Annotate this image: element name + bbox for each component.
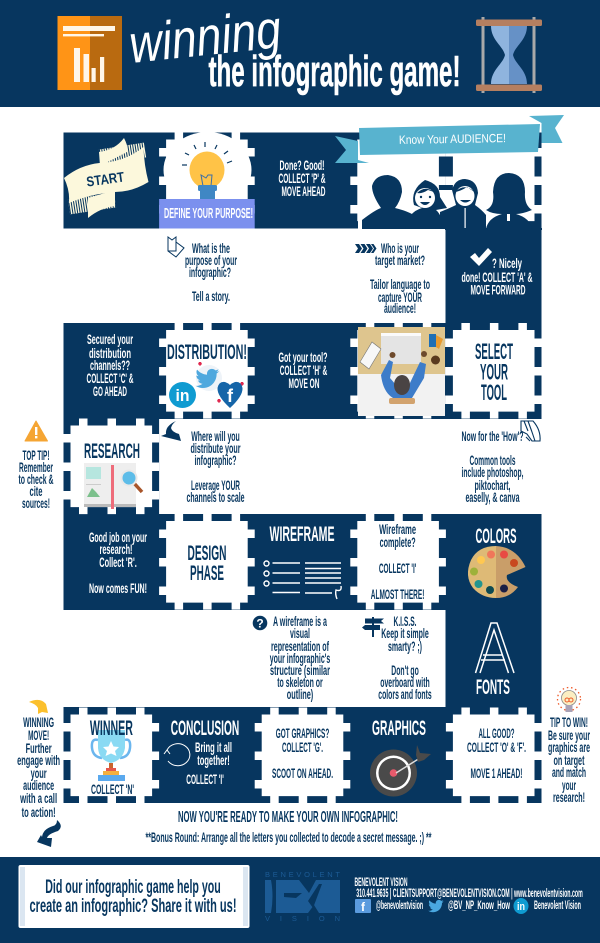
- icon: facebook: [355, 899, 371, 914]
- panel: wireframe complete: ALMOST THERE!: [371, 586, 424, 602]
- text: where will you distribute: distribute your: [190, 440, 241, 456]
- panel: wireframe complete: [350, 514, 446, 610]
- icon: linkedin: in: [176, 386, 190, 405]
- text: where will you distribute: Where will you: [191, 428, 240, 444]
- text: winning move: [17, 714, 60, 820]
- icon: trophy: [92, 730, 130, 781]
- text: channels to scale: [186, 489, 245, 505]
- panel: colors: COLORS: [476, 525, 516, 548]
- text: nicely done: done! COLLECT 'A' &: [462, 269, 532, 285]
- text: winning move: MOVE!: [28, 727, 49, 743]
- panel: desk illustration: [350, 323, 446, 419]
- text: who is your target market: Tailor language to: [370, 276, 430, 292]
- text: top tip: TOP TIP!: [22, 447, 50, 463]
- text: what is the purpose: Tell a story.: [192, 288, 230, 304]
- start label: START: [85, 168, 126, 190]
- panel: fonts: FONTS: [476, 676, 510, 699]
- icon: chevrons: [355, 244, 376, 253]
- text: a wireframe is: outline): [287, 686, 313, 702]
- panel: wireframe: [264, 523, 341, 599]
- icon: wireframe lines: [264, 561, 341, 599]
- icon: letter A outline: [476, 623, 514, 673]
- panel: design phase: PHASE: [190, 562, 224, 585]
- text: winning move: your: [31, 765, 47, 781]
- icon: target: [370, 745, 431, 796]
- panel: wireframe: WIREFRAME: [270, 523, 334, 546]
- header band: [0, 0, 600, 107]
- text: kiss: Don't go: [391, 662, 419, 678]
- text: COLLECT 'C' &: [86, 370, 134, 386]
- panel: got graphics: GOT GRAPHICS?: [276, 725, 329, 741]
- board: navy path: [64, 132, 542, 803]
- text: secured channels: distribution: [89, 345, 131, 361]
- text: secured channels: channels??: [90, 357, 130, 373]
- panel: start: [64, 138, 148, 218]
- icon: light bulb: [182, 142, 232, 202]
- icon: check mark: [470, 248, 492, 266]
- text: a wireframe is: [270, 613, 330, 702]
- text: kiss: overboard with: [380, 674, 430, 690]
- icon: facebook: f: [361, 900, 366, 914]
- icon: signpost: [362, 617, 384, 637]
- text: secured channels: Secured your: [87, 331, 133, 347]
- icon: orange report: [58, 16, 122, 90]
- text: good job on your research: Collect 'R'.: [99, 554, 137, 570]
- panel: all good: [446, 708, 542, 803]
- text: where will you distribute: [186, 428, 245, 505]
- footer band: [0, 857, 600, 943]
- text: a wireframe is: representation of: [271, 638, 329, 654]
- text: winning move: to action!: [22, 804, 56, 820]
- text: kiss: Keep it simple: [381, 625, 429, 641]
- text: a wireframe is: structure (similar: [270, 662, 330, 678]
- panel: define your purpose: [159, 132, 255, 228]
- text: who is your target market: [370, 240, 430, 316]
- panel: conclusion: [164, 717, 239, 787]
- icon: curvy arrow: [37, 820, 61, 847]
- text: Good job on your: [89, 529, 147, 545]
- text: a wireframe is: to skeleton or: [277, 674, 323, 690]
- text: done good: Done? Good!: [280, 157, 324, 173]
- panel: select your tool: YOUR: [480, 360, 508, 384]
- panel: all good: MOVE 1 AHEAD!: [470, 765, 522, 781]
- text: now for the how: Common tools: [470, 452, 516, 468]
- panel: conclusion: Bring it all: [195, 739, 232, 755]
- icon: crescent arrow: [161, 421, 181, 441]
- panel: graphics: GRAPHICS: [372, 717, 426, 740]
- text: kiss: K.I.S.S.: [394, 613, 416, 629]
- text: tip to win: [548, 714, 590, 805]
- text: got your tool: [278, 349, 328, 391]
- panel: all good: COLLECT 'O' & 'F'.: [467, 739, 526, 755]
- icon: book and magnifier: [84, 463, 142, 509]
- callout: share with us: create an infographic? Share it with us!: [30, 896, 237, 917]
- icon: twitter: [195, 362, 244, 391]
- text: who is your target market: audience!: [384, 300, 416, 316]
- logo: benevolent vision: [265, 870, 340, 923]
- text: COLLECT 'P' &: [278, 170, 326, 186]
- text: to check &: [18, 471, 54, 487]
- icon: linkedin: in: [517, 901, 525, 913]
- icon: question mark: ?: [256, 616, 264, 630]
- text: nicely done: [462, 255, 532, 298]
- icon: twitter: [428, 900, 444, 912]
- text: secured channels: [86, 331, 134, 399]
- text: winning move: with a call: [20, 790, 57, 806]
- contact info: BENEVOLENT VISION: [354, 877, 408, 889]
- heading: DISTRIBUTION!: [167, 341, 247, 364]
- text: MOVE AHEAD: [282, 183, 326, 199]
- icon: facebook heart: f: [227, 386, 234, 406]
- text: done good: [278, 157, 326, 199]
- panel: colors: [468, 525, 526, 598]
- panel: nicely done: [462, 248, 532, 298]
- icon: warning triangle: [25, 421, 48, 441]
- banner: know your audience: [335, 115, 564, 163]
- contact info: @benevolentvision: [376, 900, 423, 912]
- text: where will you distribute: Leverage YOUR: [191, 477, 240, 493]
- panel: all good: ALL GOOD?: [478, 725, 514, 741]
- text: Now for the 'How'?: [462, 428, 524, 444]
- icon: question mark: [253, 616, 267, 630]
- text: DEFINE YOUR PURPOSE!: [164, 205, 253, 222]
- text: top tip: sources!: [22, 495, 50, 511]
- callout: share with us: [18, 865, 250, 928]
- text: kiss: smarty? ;): [388, 638, 422, 654]
- panel: got graphics: COLLECT 'G'.: [282, 739, 323, 755]
- text: good job on your research: [89, 529, 147, 596]
- text: winning move: engage with: [17, 752, 60, 768]
- logo: benevolent vision: BENEVOLENT: [265, 870, 340, 879]
- panel: distribution: [159, 323, 255, 419]
- person 3: [440, 179, 486, 229]
- panel: conclusion: COLLECT 'I': [186, 771, 224, 787]
- text: Remember: [19, 459, 53, 475]
- text: what is the purpose: infographic?: [189, 264, 231, 280]
- text: a wireframe is: A wireframe is a: [273, 613, 327, 629]
- text: your infographic's: [270, 650, 330, 666]
- callout: share with us: Did our infographic game help you: [45, 877, 221, 898]
- text: COLLECT 'H' &: [280, 362, 327, 378]
- text: winning move: audience: [23, 777, 54, 793]
- panel: design phase: DESIGN: [188, 542, 226, 565]
- icon: shooting star: [29, 700, 48, 714]
- panel: conclusion: together!: [197, 752, 230, 768]
- text: good job on your research: Now comes FUN!: [89, 580, 147, 596]
- panel: select your tool: [446, 323, 542, 419]
- panel: wireframe complete: Wireframe: [379, 521, 416, 537]
- text: nicely done: ? Nicely: [492, 255, 522, 271]
- icon: hand: [521, 421, 540, 441]
- text: purpose of your: [185, 252, 237, 268]
- logo: benevolent vision: VISION: [265, 914, 340, 923]
- banner label: Know Your AUDIENCE!: [399, 131, 506, 147]
- contact info: [354, 877, 583, 914]
- text: nicely done: MOVE FORWARD: [470, 282, 526, 298]
- text: got your tool: Got your tool?: [278, 349, 328, 365]
- text: a wireframe is: visual: [290, 625, 310, 641]
- text: now for the how: easelly, & canva: [466, 489, 520, 505]
- icon: tip bulb: [558, 688, 580, 712]
- text: winning move: Further: [26, 740, 52, 756]
- text: tip to win: your: [562, 777, 576, 793]
- text: good job on your research: research!: [100, 541, 132, 557]
- icon: linkedin: [514, 898, 528, 914]
- icon: palette: [468, 546, 526, 598]
- text: who is your target market: capture YOUR: [378, 289, 422, 305]
- panel: select your tool: SELECT: [475, 339, 513, 364]
- text: CONCLUSION: [171, 717, 239, 740]
- text: top tip: cite: [30, 483, 43, 499]
- text: include photoshop,: [462, 464, 524, 480]
- panel: winner: WINNER: [90, 717, 133, 740]
- text: top tip: [18, 447, 54, 511]
- panel: winner: COLLECT 'N': [91, 781, 134, 797]
- text: who is your target market: target market?: [375, 252, 425, 268]
- panel: winner: [64, 708, 159, 803]
- text: what is the purpose: [185, 240, 237, 304]
- text: where will you distribute: infographic?: [194, 452, 236, 468]
- text: now for the how: piktochart,: [474, 477, 510, 493]
- panel: wireframe complete: complete?: [380, 534, 416, 550]
- text: winning move: WINNING: [23, 714, 54, 730]
- panel: audience people: [350, 132, 542, 230]
- panel: got graphics: [255, 708, 350, 803]
- person 1: [362, 175, 421, 229]
- text: secured channels: GO AHEAD: [93, 383, 127, 399]
- icon: hourglass: [476, 17, 542, 93]
- panel: wireframe complete: COLLECT 'I': [379, 560, 416, 576]
- panel: design phase: [159, 514, 255, 610]
- panel: fonts: [476, 623, 514, 699]
- icon: arrow outline: [168, 237, 184, 257]
- panel: research: [64, 418, 159, 514]
- panel: select your tool: TOOL: [481, 380, 507, 405]
- panel: graphics: [370, 717, 431, 796]
- person 4: [486, 173, 532, 229]
- text: who is your target market: Who is your: [381, 240, 419, 256]
- person 2: [405, 180, 447, 229]
- panel: got graphics: SCOOT ON AHEAD.: [272, 765, 333, 781]
- panel: research: RESEARCH: [84, 440, 140, 463]
- contact info: @BV_NP_Know_How: [448, 900, 510, 912]
- icon: circular arrow: [164, 744, 190, 766]
- text: what is the purpose: What is the: [192, 240, 230, 256]
- text: kiss: [378, 613, 432, 702]
- text: now for the how: [462, 428, 524, 505]
- text: colors and fonts: [378, 686, 432, 702]
- text: got your tool: MOVE ON: [288, 375, 320, 391]
